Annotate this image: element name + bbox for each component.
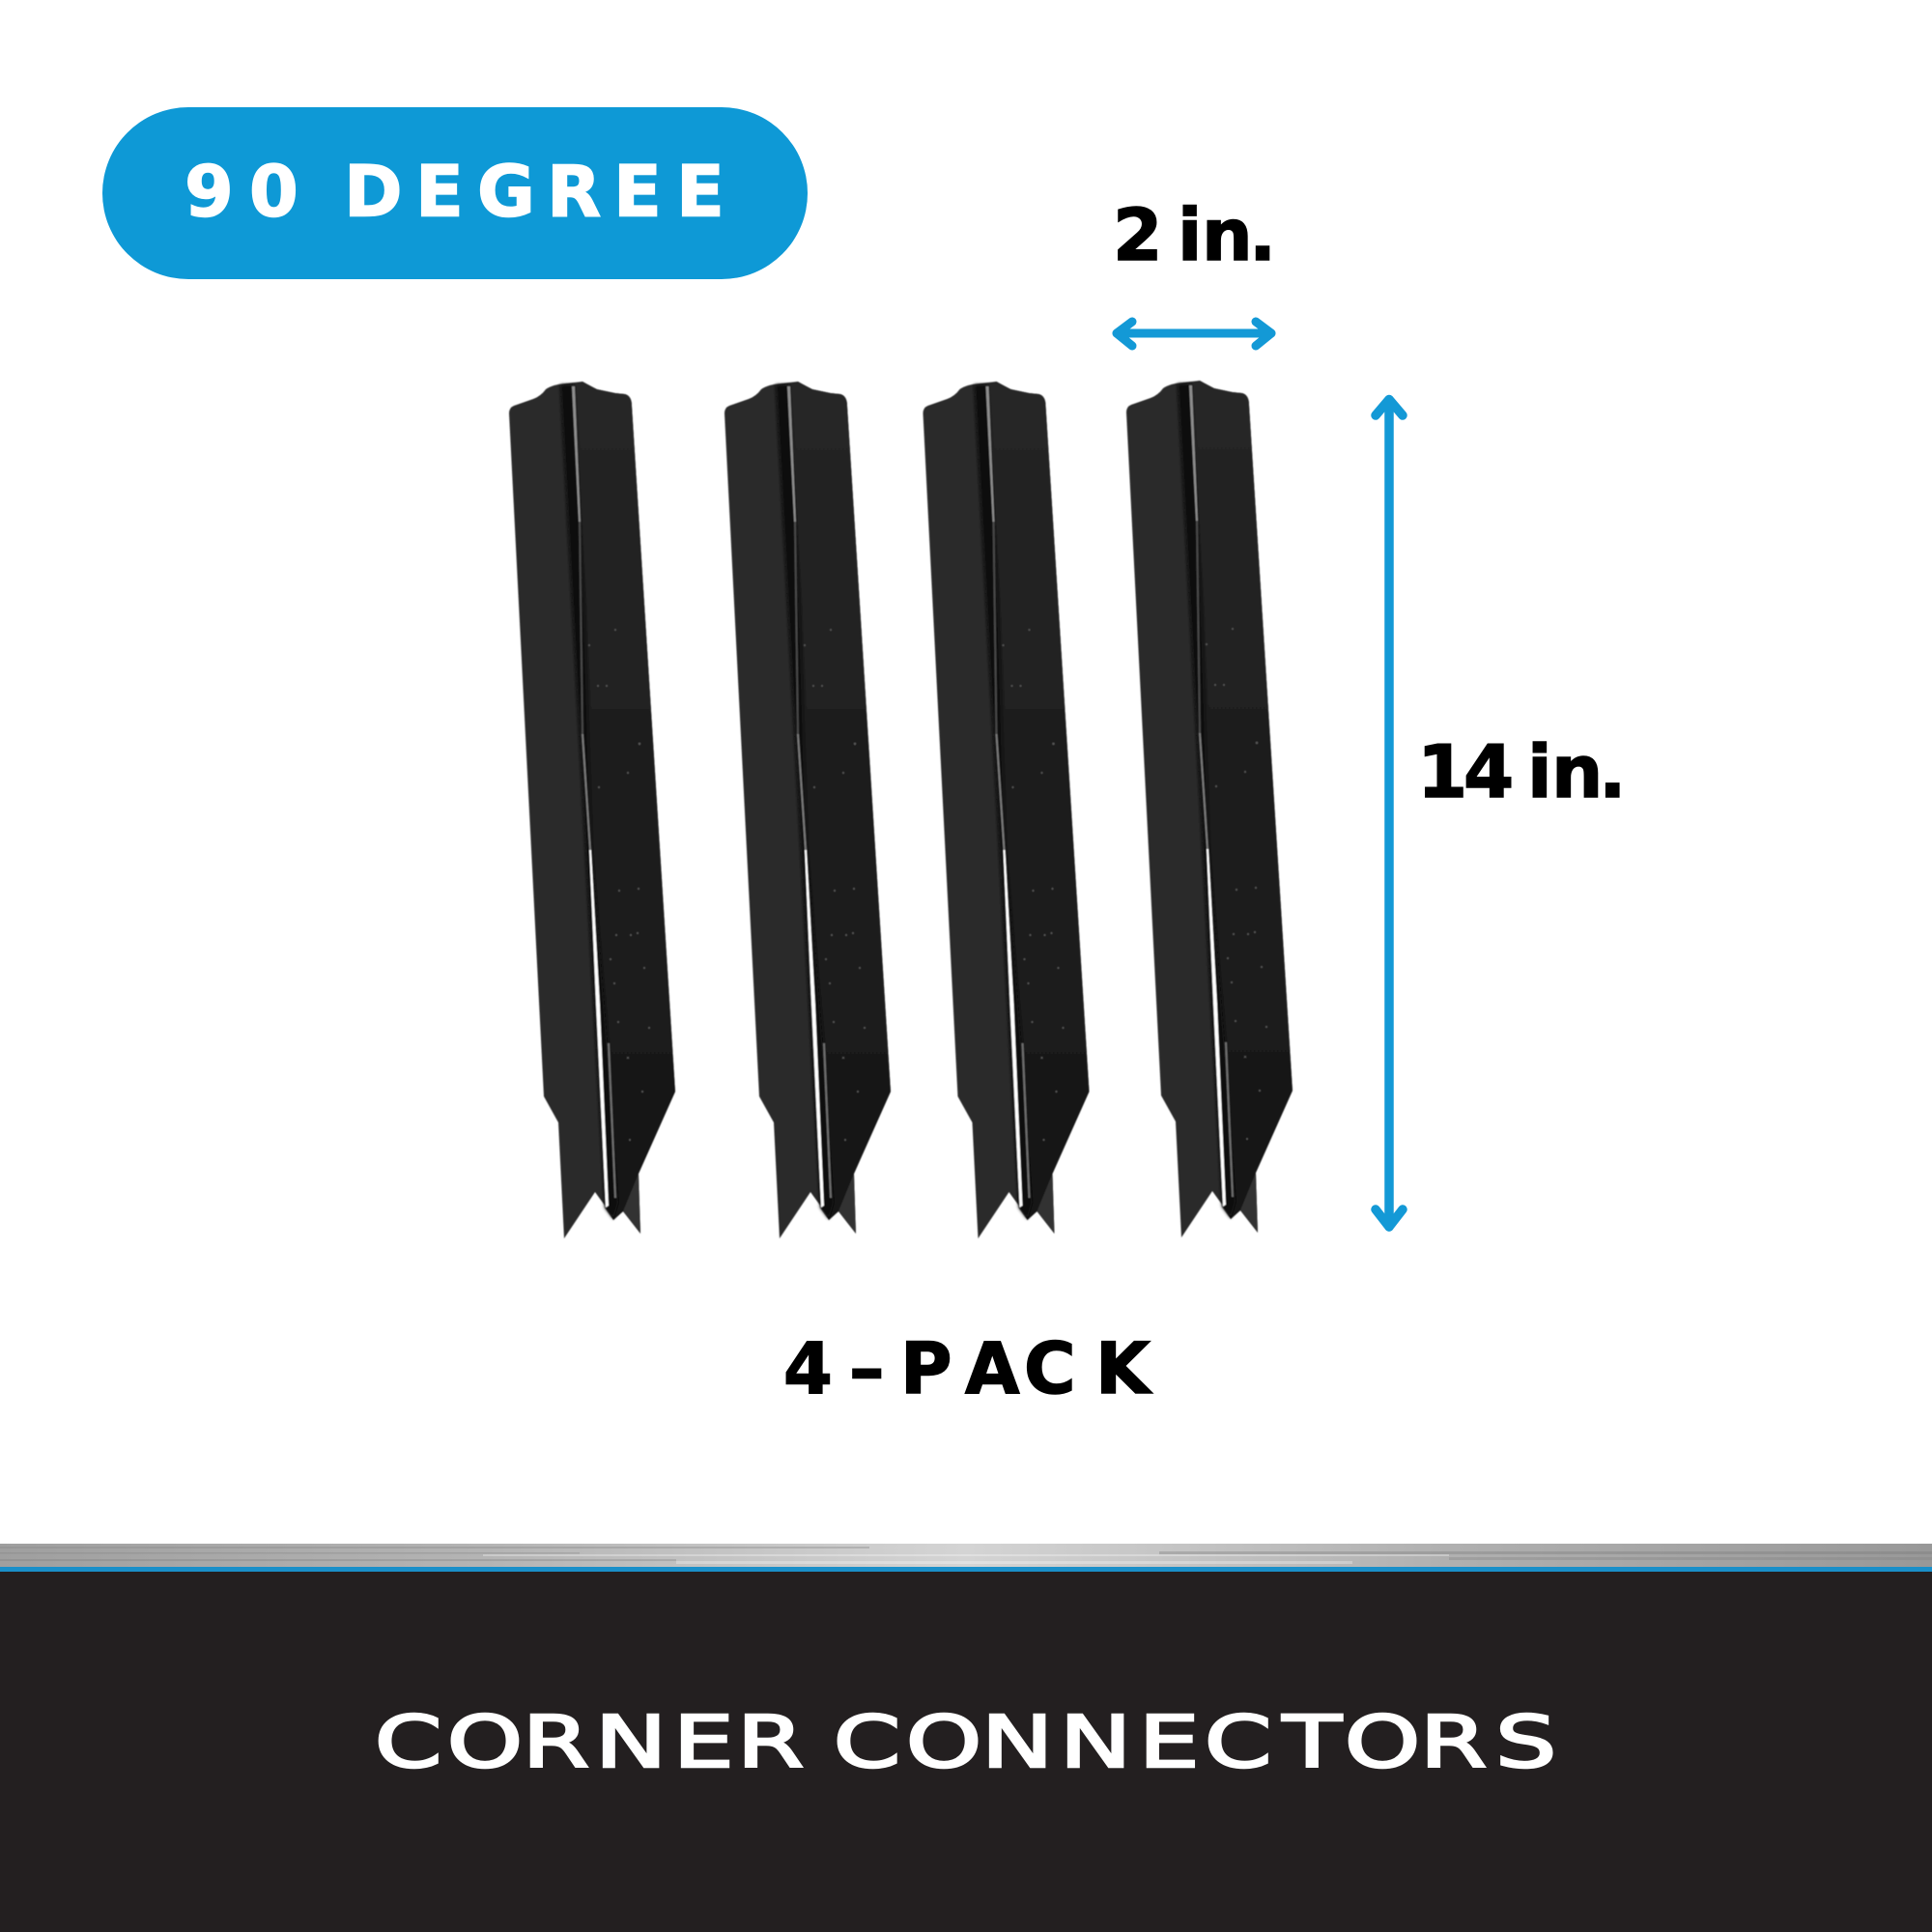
- connector 2: [724, 382, 891, 1238]
- connector 4: [1126, 381, 1293, 1237]
- footer band: [0, 1572, 1932, 1932]
- connector 1: [509, 382, 675, 1238]
- arrow: length dimension: [1376, 400, 1403, 1227]
- badge: 90 degree: 90 DEGREE: [185, 151, 724, 234]
- width label: 2 in.: 2 in.: [1113, 194, 1276, 277]
- connector 3: [923, 382, 1090, 1238]
- footer title: corner connectors: CORNER CONNECTORS: [375, 1700, 1556, 1784]
- pack label: 4-PACK: 4–PACK: [783, 1328, 1152, 1410]
- badge: 90 degree: [102, 107, 808, 279]
- metallic divider band: [0, 1544, 1932, 1572]
- length label: 14 in.: 14 in.: [1417, 729, 1627, 814]
- arrow: width dimension: [1117, 322, 1271, 346]
